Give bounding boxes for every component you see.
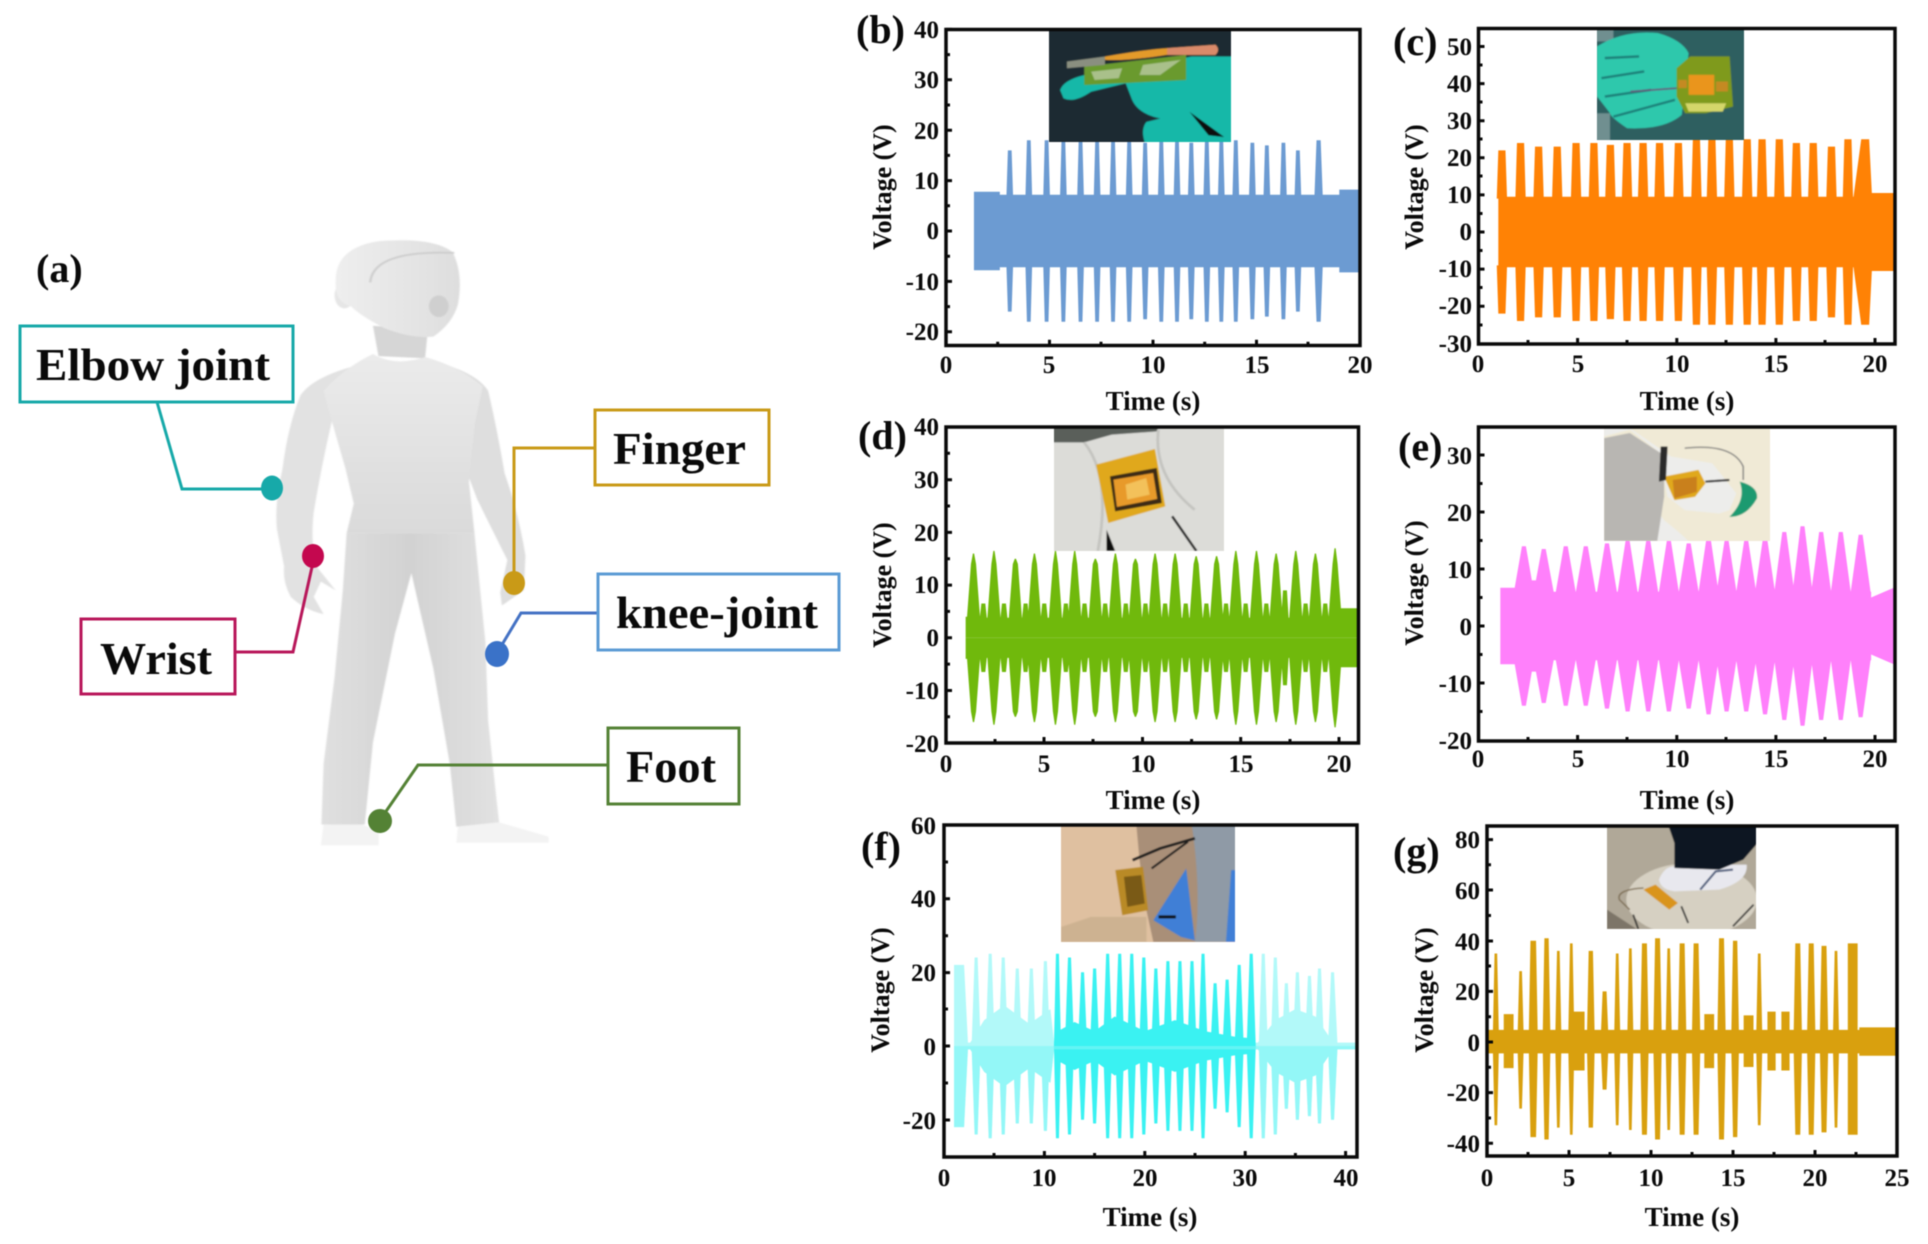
x axis numbers f: 20 (1132, 1165, 1158, 1192)
x axis numbers f: 10 (1032, 1165, 1056, 1192)
x axis numbers c: 10 (1664, 351, 1690, 378)
y axis numbers e (1439, 443, 1472, 755)
axis title voltage g: Voltage (V) (1410, 927, 1439, 1053)
x axis numbers g: 5 (1563, 1165, 1575, 1192)
y axis numbers d: 0 (926, 625, 939, 652)
callout: foot (368, 728, 739, 833)
inset photo: foot (1606, 826, 1757, 930)
callout: foot: Foot (626, 742, 716, 792)
x axis numbers f: 0 (938, 1165, 950, 1192)
y axis numbers c: 10 (1447, 182, 1472, 209)
x axis numbers f: 30 (1232, 1165, 1258, 1192)
axis title voltage c: Voltage (V) (1400, 124, 1429, 250)
panel d: voltage vs time, elbow (858, 413, 1359, 815)
y axis numbers f: -20 (903, 1108, 936, 1135)
ticks e (1478, 455, 1875, 741)
y axis numbers d: -20 (906, 731, 939, 758)
panel e: voltage vs time, wrist (1398, 423, 1895, 815)
callout: elbow joint (20, 326, 293, 500)
x axis numbers g: 10 (1638, 1165, 1664, 1192)
axis title time b: Time (s) (1106, 386, 1200, 416)
y axis numbers g: 40 (1455, 929, 1480, 956)
panel b: voltage vs time, finger (856, 7, 1372, 416)
x axis numbers e: 0 (1472, 746, 1484, 773)
y axis numbers g: -20 (1447, 1080, 1480, 1107)
y axis numbers d: 40 (914, 414, 939, 441)
y axis numbers g: 60 (1455, 878, 1480, 905)
y axis numbers g: 80 (1455, 827, 1480, 854)
waveform g (1487, 938, 1897, 1140)
y axis numbers b: 10 (914, 168, 939, 195)
x axis numbers c: 15 (1764, 351, 1788, 378)
ticks b (946, 29, 1308, 346)
axis title time f: Time (s) (1103, 1202, 1197, 1232)
y axis numbers e: 0 (1460, 614, 1472, 641)
waveform b (974, 140, 1360, 322)
y axis numbers c: 50 (1447, 34, 1472, 61)
y axis numbers b: 20 (914, 118, 939, 145)
y axis numbers c (1439, 34, 1472, 358)
y axis numbers g: 0 (1468, 1030, 1480, 1057)
y axis numbers d: 10 (914, 572, 939, 599)
y axis numbers g: -40 (1447, 1131, 1480, 1158)
axis title time g: Time (s) (1645, 1202, 1739, 1232)
x axis numbers d (940, 751, 1352, 778)
y axis numbers f: 20 (911, 960, 936, 987)
panel label a: (a) (36, 246, 83, 291)
callout: wrist: Wrist (100, 634, 212, 684)
x axis numbers c: 5 (1572, 351, 1584, 378)
x axis numbers d: 20 (1326, 751, 1352, 778)
panel label g: (g) (1393, 829, 1440, 874)
x axis numbers g: 25 (1884, 1165, 1910, 1192)
x axis numbers e (1472, 746, 1888, 773)
x axis numbers f (938, 1165, 1358, 1192)
x axis numbers b: 20 (1348, 352, 1372, 379)
ticks f (944, 862, 1346, 1157)
y axis numbers b (906, 17, 939, 346)
x axis numbers b: 0 (940, 352, 952, 379)
y axis numbers b: -20 (906, 319, 939, 346)
waveform e (1500, 526, 1895, 726)
y axis numbers c: 40 (1447, 71, 1472, 98)
y axis numbers c: -20 (1439, 293, 1472, 320)
panel label f: (f) (861, 824, 901, 869)
y axis numbers f: 60 (911, 813, 936, 840)
inset photo: knee (1060, 826, 1236, 943)
axes e (1478, 427, 1895, 741)
y axis numbers e: -10 (1439, 671, 1472, 698)
y axis numbers e: 30 (1447, 443, 1472, 470)
axes b (946, 30, 1360, 346)
ticks c (1478, 46, 1875, 344)
panel c: voltage vs time, hand (1393, 19, 1895, 416)
callout: wrist (81, 544, 324, 694)
axis title voltage b: Voltage (V) (868, 124, 897, 250)
y axis numbers g: 20 (1455, 979, 1480, 1006)
y axis numbers d: 30 (914, 467, 939, 494)
y axis numbers d: 20 (914, 520, 939, 547)
callout: finger (503, 410, 769, 595)
panel label c: (c) (1393, 19, 1437, 64)
x axis numbers b: 5 (1043, 352, 1055, 379)
x axis numbers g: 15 (1720, 1165, 1746, 1192)
x axis numbers e: 15 (1764, 746, 1788, 773)
y axis numbers f (903, 813, 936, 1135)
x axis numbers d: 10 (1130, 751, 1156, 778)
x axis numbers e: 5 (1572, 746, 1584, 773)
y axis numbers c: -30 (1439, 331, 1472, 358)
x axis numbers e: 20 (1862, 746, 1888, 773)
y axis numbers c: 0 (1460, 219, 1472, 246)
axis title time e: Time (s) (1640, 785, 1734, 815)
panel label d: (d) (858, 413, 907, 458)
panel f: voltage vs time, knee (861, 813, 1358, 1232)
waveform c (1497, 139, 1895, 325)
waveform d (966, 548, 1359, 727)
y axis numbers b: -10 (906, 269, 939, 296)
x axis numbers b (940, 352, 1372, 379)
inset photo: wrist (1604, 428, 1770, 542)
panel a: human body with sensor locations (20, 240, 839, 845)
x axis numbers b: 15 (1244, 352, 1270, 379)
x axis numbers g: 20 (1802, 1165, 1828, 1192)
y axis numbers c: -10 (1439, 256, 1472, 283)
callout: knee joint (485, 574, 839, 667)
ticks g (1487, 840, 1856, 1156)
x axis numbers d: 15 (1228, 751, 1254, 778)
axis title time d: Time (s) (1106, 785, 1200, 815)
x axis numbers f: 40 (1334, 1165, 1358, 1192)
y axis numbers e: -20 (1439, 728, 1472, 755)
y axis numbers e: 10 (1447, 557, 1472, 584)
inset photo: elbow (1053, 428, 1224, 552)
y axis numbers f: 0 (924, 1034, 936, 1061)
axes g (1487, 826, 1897, 1156)
y axis numbers c: 30 (1447, 108, 1472, 135)
x axis numbers c (1472, 351, 1888, 378)
axes f (944, 825, 1357, 1157)
waveform f (954, 954, 1356, 1138)
axes c (1478, 28, 1895, 344)
panel g: voltage vs time, foot (1393, 823, 1910, 1232)
panel label b: (b) (856, 7, 905, 52)
y axis numbers e: 20 (1447, 500, 1472, 527)
x axis numbers g (1481, 1165, 1910, 1192)
y axis numbers g (1447, 827, 1480, 1158)
y axis numbers b: 0 (926, 218, 939, 245)
y axis numbers c: 20 (1447, 145, 1472, 172)
x axis numbers g: 0 (1481, 1165, 1493, 1192)
callout: finger: Finger (613, 424, 746, 474)
y axis numbers d (906, 414, 939, 758)
x axis numbers c: 0 (1472, 351, 1484, 378)
axes d (946, 427, 1358, 743)
x axis numbers d: 0 (940, 751, 952, 778)
y axis numbers f: 40 (911, 886, 936, 913)
axis title time c: Time (s) (1640, 386, 1734, 416)
callout: elbow joint: Elbow joint (36, 340, 270, 390)
x axis numbers c: 20 (1862, 351, 1888, 378)
x axis numbers d: 5 (1038, 751, 1050, 778)
axis title voltage d: Voltage (V) (868, 522, 897, 648)
y axis numbers b: 30 (914, 67, 939, 94)
ticks d (946, 453, 1339, 743)
axis title voltage e: Voltage (V) (1400, 520, 1429, 646)
axis title voltage f: Voltage (V) (866, 927, 895, 1053)
inset photo: hand (1596, 29, 1745, 141)
panel label e: (e) (1398, 424, 1442, 469)
inset photo: finger (1048, 30, 1232, 143)
x axis numbers e: 10 (1664, 746, 1690, 773)
human figure (276, 240, 549, 845)
callout: knee joint: knee-joint (616, 588, 818, 638)
x axis numbers b: 10 (1140, 352, 1166, 379)
y axis numbers d: -10 (906, 678, 939, 705)
y axis numbers b: 40 (914, 17, 939, 44)
